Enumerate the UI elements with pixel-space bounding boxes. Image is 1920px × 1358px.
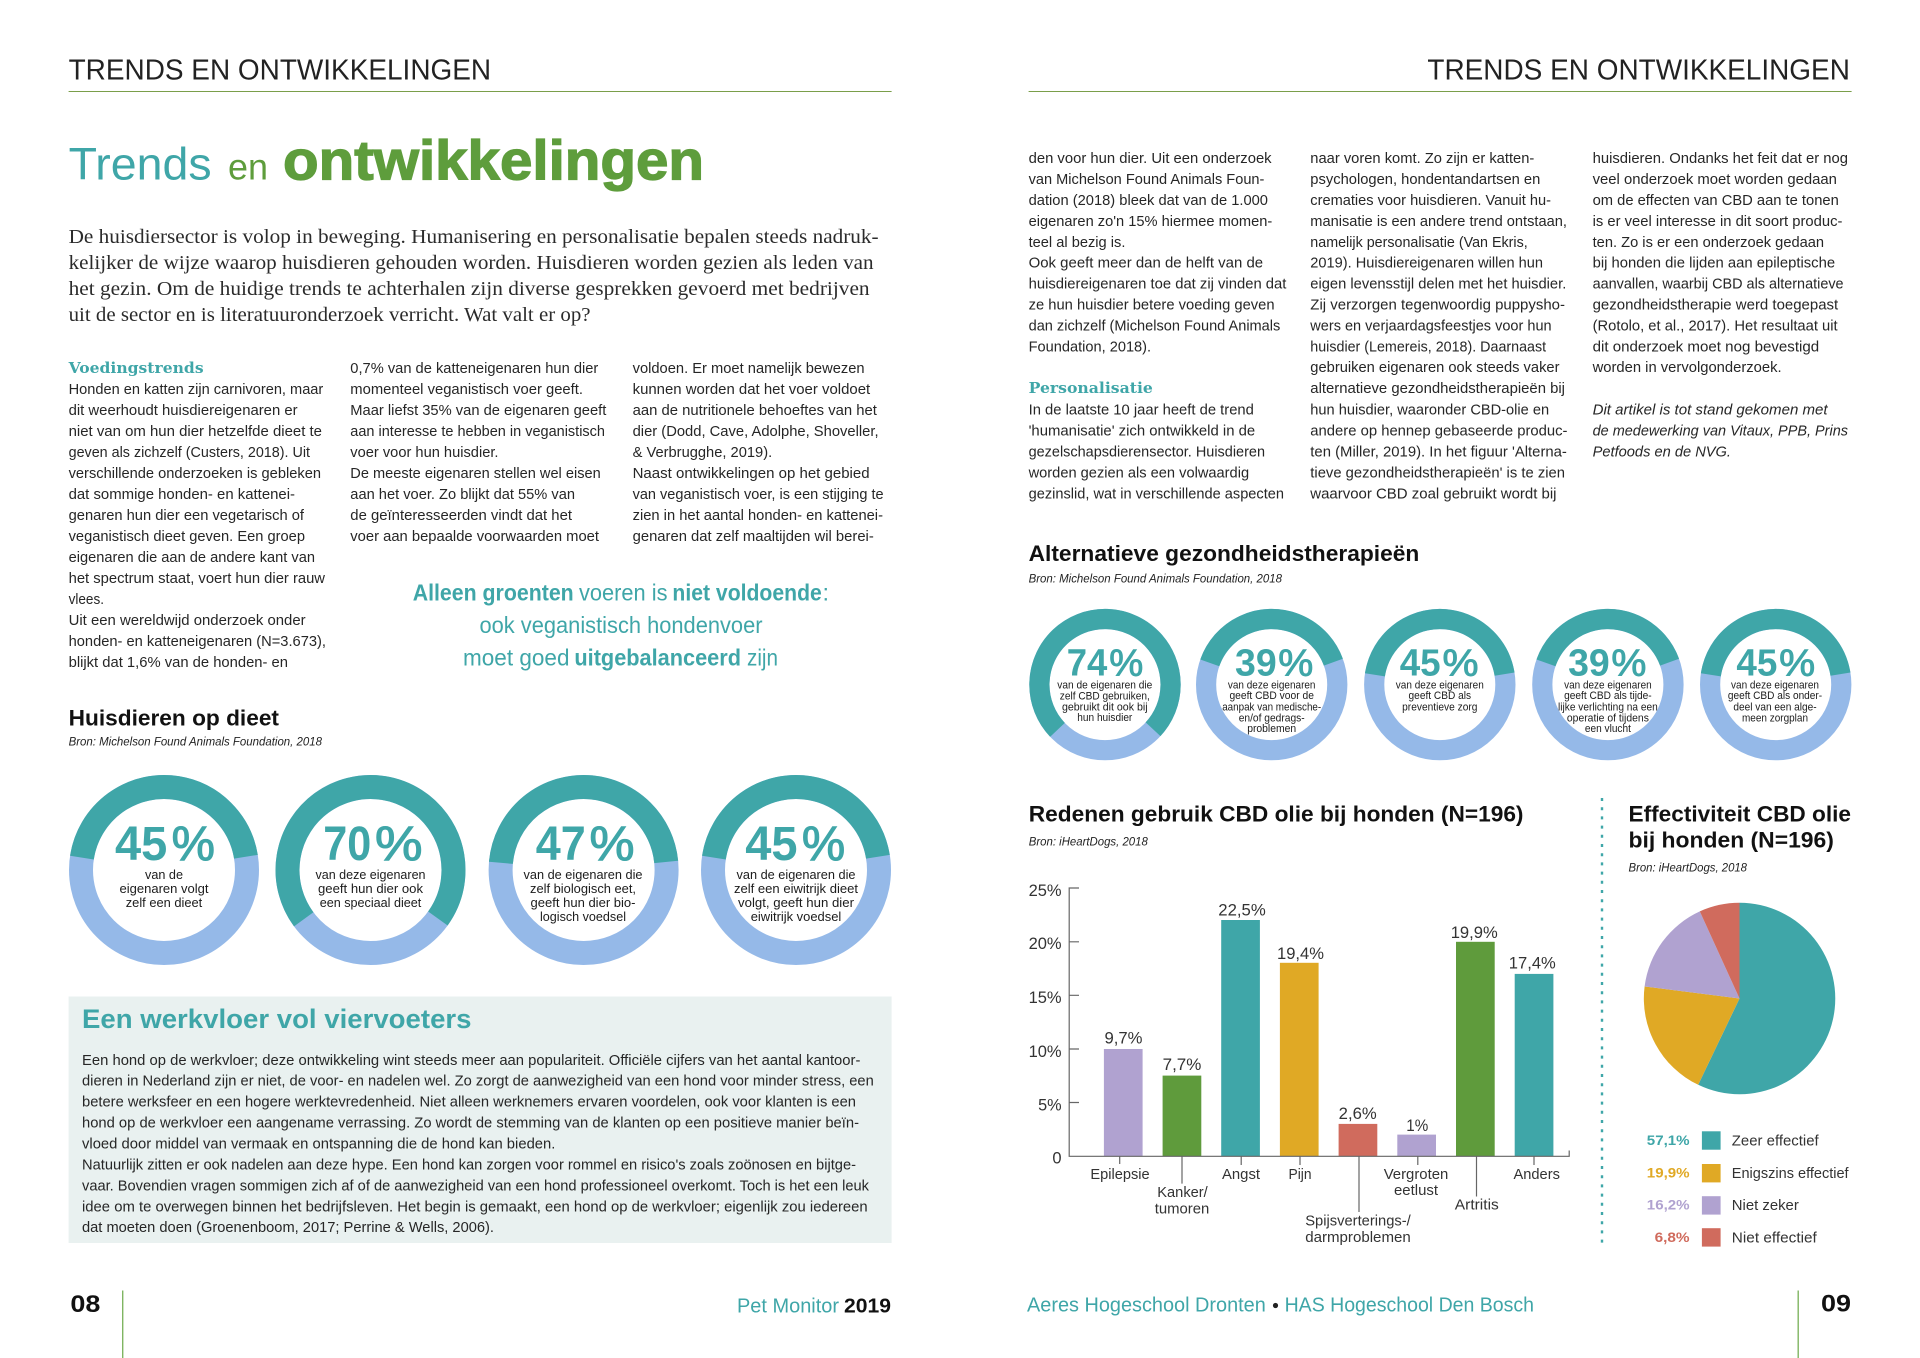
category labels: Kanker/ [1157, 1184, 1209, 1201]
article column 5: andere op hennep gebaseerde produc- [1310, 423, 1568, 439]
article column 1: Voedingstrends: verschillende onderzoeken is gebleken [69, 466, 321, 482]
value labels: 1% [1406, 1117, 1429, 1135]
footer right: 09 [1821, 1290, 1851, 1318]
donut: 39% tijdelijke verlichting: % [1611, 642, 1646, 684]
donut: 39% medische problemen: van deze eigenaren [1228, 680, 1315, 692]
value labels: 2,6% [1339, 1105, 1377, 1123]
article column 6: Dit artikel is tot stand gekomen met [1593, 402, 1829, 418]
article column 1: Voedingstrends: honden- en katteneigenaren (N=3.673), [69, 634, 326, 650]
donut: 70% speciaal dieet: 70 [323, 818, 371, 871]
donut: 39% medische problemen: en/of gedrags- [1239, 712, 1305, 724]
donut: 45% eiwitrijk: zelf een eiwitrijk dieet [734, 881, 858, 896]
running header right: TRENDS EN ONTWIKKELINGEN [1427, 54, 1850, 86]
heading: Effectiviteit CBD olie: bij honden (N=196) [1628, 828, 1834, 852]
article column 3: voldoen. Er moet namelijk bewezen [633, 361, 865, 377]
donut: 47% biologisch: % [590, 818, 634, 871]
donut: 45% eigenaren volgt dieet: 45 [115, 818, 167, 871]
category labels: Epilepsie [1090, 1166, 1150, 1183]
donut: 45% eigenaren volgt dieet: zelf een dieet [126, 895, 203, 910]
article column 5: alternatieve gezondheidstherapieën bij [1310, 381, 1565, 397]
panel: Een werkvloer vol viervoeters: vloed door middel van vermaak en ontspanning die de hond kan bieden. [82, 1137, 555, 1153]
category labels: Anders [1514, 1166, 1560, 1183]
category labels: Pijn [1288, 1166, 1312, 1183]
donut: 45% eigenaren volgt dieet [69, 775, 259, 965]
article column 2: voer voor hun huisdier. [350, 445, 498, 461]
footer right: HAS Hogeschool Den Bosch [1285, 1294, 1534, 1316]
heading: Huisdieren op dieet: Huisdieren op dieet [69, 705, 280, 730]
article column 6: worden in vervolgonderzoek. [1592, 360, 1782, 376]
donut: 45% eigenaren volgt dieet: % [172, 818, 215, 871]
donut: 45% preventieve zorg [1365, 610, 1515, 760]
title: Trends [69, 138, 212, 189]
title [69, 128, 704, 191]
intro paragraph: uit de sector en is literatuuronderzoek verricht. Wat valt er op? [69, 304, 591, 326]
category labels: Artritis [1455, 1196, 1499, 1213]
panel: Een werkvloer vol viervoeters: dieren in Nederland zijn er niet, de voor- en nadelen wel. Zo zorgt de aanwezigheid van een hond voor minder stress, een [82, 1074, 874, 1090]
article column 4 with Personalisatie: Foundation, 2018). [1029, 339, 1151, 355]
article column 5: tieve gezondheidstherapieën' is te zien [1310, 466, 1565, 482]
heading: Effectiviteit CBD olie: Effectiviteit CBD olie [1628, 802, 1851, 827]
article column 1: Voedingstrends: geven als zichzelf (Custers, 2018). Uit [69, 445, 310, 461]
article column 6: gezondheidstherapie werd toegepast [1593, 298, 1838, 314]
intro paragraph: kelijker de wijze waarop huisdieren gehouden worden. Huisdieren worden gezien als leden van [69, 252, 874, 274]
footer right [1027, 1290, 1851, 1358]
footer left: 08 [70, 1291, 100, 1318]
intro paragraph: De huisdiersector is volop in beweging. Humanisering en personalisatie bepalen steeds nadruk- [69, 226, 879, 248]
donut: 45% eiwitrijk: % [802, 818, 845, 871]
bars [1104, 920, 1553, 1156]
article column 1: Voedingstrends: dat sommige honden- en kattenei- [69, 487, 295, 503]
article column 6 [1592, 151, 1848, 460]
article column 2: De meeste eigenaren stellen wel eisen [350, 466, 601, 482]
donut: 74% ook bij huisdier: gebruikt dit ook bij [1062, 701, 1148, 713]
donut: 39% tijdelijke verlichting: operatie of tijdens [1567, 712, 1649, 724]
article column 4 with Personalisatie: Personalisatie [1029, 379, 1153, 397]
article column 1: Voedingstrends: genaren hun dier een vegetarisch of [69, 508, 304, 524]
article column 3: dier (Dodd, Cave, Adolphe, Shoveller, [633, 424, 879, 440]
donut: 47% biologisch: geeft hun dier bio- [530, 895, 636, 910]
donut: 45% algemeen zorgplan: geeft CBD als onder- [1728, 690, 1823, 702]
article column 5: wers en verjaardagsfeestjes voor hun [1309, 318, 1552, 334]
footer right: Aeres Hogeschool Dronten [1027, 1294, 1266, 1316]
article column 4 with Personalisatie: gezelschapsdierensector. Huisdieren [1029, 444, 1265, 460]
article column 3: kunnen worden dat het voer voldoet [633, 382, 870, 398]
pie legend: Enigszins effectief [1732, 1165, 1849, 1182]
donut: 39% tijdelijke verlichting: een vlucht [1585, 723, 1631, 735]
donut: 70% speciaal dieet: van deze eigenaren [316, 867, 426, 882]
panel: Een werkvloer vol viervoeters: Een hond op de werkvloer; deze ontwikkeling wint steeds meer aan populariteit. Officiële cijfers van het aantal kantoor- [82, 1053, 861, 1069]
intro paragraph: het gezin. Om de huidige trends te achterhalen zijn diverse gesprekken gevoerd met bedrijven [69, 278, 870, 300]
heading: Redenen gebruik CBD olie [1029, 802, 1524, 849]
article column 5: psychologen, hondentandartsen en [1310, 172, 1540, 188]
article column 4 with Personalisatie: teel al bezig is. [1029, 235, 1125, 251]
y axis labels: 15% [1029, 989, 1062, 1007]
donut: 39% medische problemen: 39 [1235, 642, 1277, 684]
article column 5 [1309, 151, 1568, 502]
article column 5: gebruiken eigenaren ook steeds vaker [1310, 360, 1560, 376]
article column 4 with Personalisatie: dan zichzelf (Michelson Found Animals [1029, 318, 1280, 334]
donut: 70% speciaal dieet: % [375, 818, 422, 871]
value labels: 7,7% [1163, 1056, 1202, 1074]
donut: 45% preventieve zorg: preventieve zorg [1402, 701, 1477, 713]
pull quote: uitgebalanceerd [574, 644, 741, 670]
article column 6: dit onderzoek moet nog bevestigd [1593, 339, 1819, 355]
article column 4 with Personalisatie: den voor hun dier. Uit een onderzoek [1029, 151, 1272, 167]
pull quote: ook veganistisch hondenvoer [480, 612, 763, 638]
footer left [70, 1290, 891, 1358]
panel: Een werkvloer vol viervoeters [69, 996, 892, 1243]
article column 2: Maar liefst 35% van de eigenaren geeft [350, 403, 606, 419]
donut: 74% ook bij huisdier: zelf CBD gebruiken, [1060, 690, 1150, 702]
bar chart [1029, 882, 1569, 1246]
donut: 39% tijdelijke verlichting: geeft CBD als tijde- [1564, 690, 1652, 702]
pie legend: 57,1% [1647, 1133, 1690, 1148]
y axis labels [1029, 882, 1062, 1167]
article column 1: Voedingstrends: niet van om hun dier hetzelfde dieet te [69, 424, 322, 440]
pie legend [1647, 1131, 1849, 1247]
article column 6: ten. Zo is er een onderzoek gedaan [1593, 235, 1824, 251]
dotted divider [1601, 798, 1603, 1244]
donut: 45% eiwitrijk: van de eigenaren die [736, 867, 856, 882]
category labels [1090, 1166, 1560, 1246]
article column 5: naar voren komt. Zo zijn er katten- [1310, 151, 1535, 167]
donut: 39% medische problemen: geeft CBD voor de [1229, 690, 1314, 702]
article column 1: Voedingstrends: Voedingstrends [68, 359, 204, 377]
donut: 45% algemeen zorgplan: 45 [1736, 642, 1777, 684]
y axis labels: 25% [1029, 882, 1062, 900]
donut: 74% ook bij huisdier: % [1109, 642, 1143, 684]
pull quote: moet goed [463, 644, 570, 670]
intro paragraph [69, 226, 879, 326]
article column 5: crematies voor huisdieren. Vanuit hu- [1310, 193, 1551, 209]
article column 6: Petfoods en de NVG. [1593, 444, 1731, 460]
pie legend: Niet effectief [1732, 1230, 1818, 1247]
article column 1: Voedingstrends: blijkt dat 1,6% van de honden- en [69, 655, 288, 671]
article column 4 with Personalisatie: huisdiereigenaren toe dat zij vinden dat [1029, 277, 1286, 293]
category labels: Vergroten [1384, 1166, 1448, 1183]
donut: 74% ook bij huisdier: van de eigenaren die [1057, 680, 1152, 692]
article column 1: Voedingstrends: vlees. [69, 592, 104, 608]
article column 2: momenteel veganistisch voer geeft. [350, 382, 583, 398]
article column 1: Voedingstrends: eigenaren die aan de andere kant van [69, 550, 315, 566]
value labels: 17,4% [1509, 954, 1556, 972]
value labels: 22,5% [1218, 902, 1266, 920]
value labels: 19,4% [1277, 945, 1324, 963]
donut: 70% speciaal dieet: een speciaal dieet [320, 895, 422, 910]
donut: 45% algemeen zorgplan: % [1779, 642, 1815, 684]
article column 4 with Personalisatie: worden gezien als een volwaardig [1028, 466, 1249, 482]
donut: 74% ook bij huisdier [1012, 592, 1198, 777]
donut: 70% speciaal dieet: geeft hun dier ook [318, 881, 424, 896]
donut: 39% tijdelijke verlichting: van deze eigenaren [1564, 680, 1652, 692]
donut: 45% preventieve zorg: geeft CBD als [1409, 690, 1472, 702]
pull quote: : [822, 579, 829, 605]
pie legend: Zeer effectief [1732, 1133, 1820, 1150]
article column 5: waarvoor CBD zoal gebruikt wordt bij [1309, 486, 1556, 502]
value labels [1104, 902, 1556, 1135]
heading: Effectiviteit CBD olie: Bron: iHeartDogs, 2018 [1628, 862, 1748, 874]
article column 2: de geïnteresseerden vindt dat het [350, 508, 572, 524]
article column 1: Voedingstrends: Uit een wereldwijd onderzoek onder [69, 613, 306, 629]
value labels: 19,9% [1451, 924, 1498, 942]
panel: Een werkvloer vol viervoeters: Een werkvloer vol viervoeters [82, 1004, 472, 1034]
heading: Redenen gebruik CBD olie: Redenen gebruik CBD olie bij honden (N=196) [1029, 802, 1524, 827]
article column 2: 0,7% van de katteneigenaren hun dier [350, 361, 599, 377]
title: en [228, 146, 268, 187]
donut: 45% preventieve zorg: van deze eigenaren [1396, 680, 1484, 692]
heading: Effectiviteit CBD olie [1628, 802, 1851, 874]
category labels: Spijsverterings-/ [1305, 1212, 1412, 1229]
article column 1: Voedingstrends: dit weerhoudt huisdiereigenaren er [69, 403, 298, 419]
article column 5: 2019). Huisdiereigenaren willen hun [1310, 256, 1543, 272]
category labels: eetlust [1394, 1182, 1439, 1199]
article column 3: genaren dat zelf maaltijden wil berei- [633, 529, 874, 545]
donut: 45% eigenaren volgt dieet: van de [145, 867, 183, 882]
donut: 47% biologisch: logisch voedsel [540, 909, 626, 924]
article column 5: namelijk personalisatie (Van Ekris, [1310, 235, 1528, 251]
article column 4 with Personalisatie: dation (2018) bleek dat van de 1.000 [1029, 193, 1268, 209]
donut: 39% medische problemen: problemen [1247, 723, 1296, 735]
article column 2: aan interesse te hebben in veganistisch [350, 424, 605, 440]
article column 4 with Personalisatie: ze hun huisdier betere voeding geven [1029, 298, 1275, 314]
article column 2: aan het voer. Zo blijkt dat 55% van [350, 487, 575, 503]
article column 4 with Personalisatie: 'humanisatie' zich ontwikkeld in de [1029, 423, 1255, 439]
article column 4 with Personalisatie: gezinslid, wat in verschillende aspecten [1029, 486, 1284, 502]
pull quote: zijn [747, 644, 778, 670]
donut: 45% eiwitrijk: eiwitrijk voedsel [751, 909, 841, 924]
heading: Redenen gebruik CBD olie: Bron: iHeartDogs, 2018 [1029, 837, 1148, 849]
donut: 45% algemeen zorgplan: meen zorgplan [1742, 712, 1808, 724]
donut: 45% eiwitrijk: 45 [745, 818, 798, 871]
article column 4 with Personalisatie: In de laatste 10 jaar heeft de trend [1029, 402, 1254, 418]
donut: 39% medische problemen: % [1278, 642, 1313, 684]
y axis labels: 0 [1052, 1149, 1062, 1167]
donut: 39% tijdelijke verlichting: 39 [1568, 642, 1610, 684]
heading: Alternatieve gezondheidstherapieën: Bron: Michelson Found Animals Foundation, 2018 [1029, 574, 1283, 586]
category labels: Angst [1222, 1166, 1261, 1183]
pie chart [1644, 903, 1835, 1094]
article column 2 [350, 361, 606, 545]
article column 5: manisatie is een andere trend ontstaan, [1310, 214, 1567, 230]
article column 1: Voedingstrends: het spectrum staat, voert hun dier rauw [69, 571, 326, 587]
article column 6: (Rotolo, et al., 2017). Het resultaat uit [1593, 318, 1838, 334]
donut: 47% biologisch: van de eigenaren die [524, 867, 642, 882]
panel: Een werkvloer vol viervoeters: vaar. Bovendien vragen sommigen zich af of de aanwezigheid van een hond professioneel overkomt. Toch is het een leuk [82, 1179, 870, 1195]
article column 3 [633, 361, 884, 545]
donut: 74% ook bij huisdier: hun huisdier [1077, 712, 1133, 724]
donut: 45% algemeen zorgplan [1701, 610, 1851, 760]
donut: 45% preventieve zorg: % [1442, 642, 1478, 684]
pie legend: 19,9% [1647, 1165, 1690, 1180]
article column 4 with Personalisatie: eigenaren zo'n 15% hiermee momen- [1029, 214, 1273, 230]
pull quote: niet voldoende [672, 579, 822, 605]
y axis labels: 20% [1029, 935, 1062, 953]
pie legend: 16,2% [1647, 1197, 1690, 1212]
heading: Huisdieren op dieet [69, 705, 323, 749]
article column 6: huisdieren. Ondanks het feit dat er nog [1593, 151, 1848, 167]
y axis labels: 5% [1038, 1097, 1062, 1115]
donut: 74% ook bij huisdier: 74 [1067, 642, 1107, 684]
article column 1: Voedingstrends: Honden en katten zijn carnivoren, maar [69, 382, 324, 398]
heading: Alternatieve gezondheidstherapieën: Alternatieve gezondheidstherapieën [1029, 541, 1419, 566]
running header left: TRENDS EN ONTWIKKELINGEN [69, 54, 491, 86]
panel: Een werkvloer vol viervoeters: idee om te overwegen binnen het bedrijfsleven. Het begin is gemaakt, een hond op de werkvloer; eigenlijk zou iedereen [82, 1199, 868, 1215]
article column 6: veel onderzoek moet worden gedaan [1593, 172, 1837, 188]
donut: 45% algemeen zorgplan: van deze eigenaren [1731, 680, 1819, 692]
panel: Een werkvloer vol viervoeters: hond op de werkvloer een aangename verrassing. Zo wordt de stemming van de klanten op een positieve manier beïn- [82, 1116, 859, 1132]
axes and leader lines [1069, 888, 1569, 1212]
donut: 39% tijdelijke verlichting [1524, 601, 1692, 769]
value labels: 9,7% [1104, 1030, 1143, 1048]
article column 5: eigen levensstijl delen met het huisdier. [1310, 277, 1566, 293]
article column 3: & Verbrugghe, 2019). [633, 445, 772, 461]
title: ontwikkelingen [283, 128, 704, 191]
donut: 39% tijdelijke verlichting: lijke verlichting na een [1558, 701, 1658, 713]
donut: 45% preventieve zorg: 45 [1400, 642, 1441, 684]
article column 6: bij honden die lijden aan epileptische [1593, 256, 1835, 272]
article column 4 with Personalisatie [1028, 151, 1286, 502]
pull quote [413, 579, 829, 670]
heading: Huisdieren op dieet: Bron: Michelson Found Animals Foundation, 2018 [69, 737, 323, 749]
pull quote: Alleen groenten [413, 579, 574, 605]
pull quote: voeren is [579, 579, 668, 605]
article column 3: Naast ontwikkelingen op het gebied [633, 466, 870, 482]
article column 2: voer aan bepaalde voorwaarden moet [350, 529, 599, 545]
donut: 39% medische problemen: aanpak van medische- [1222, 701, 1322, 713]
donut: 47% biologisch [493, 780, 674, 960]
footer left: 2019 [844, 1296, 891, 1318]
article column 6: de medewerking van Vitaux, PPB, Prins [1593, 423, 1848, 439]
category labels: tumoren [1155, 1200, 1209, 1218]
article column 5: huisdier (Lemereis, 2018). Daarnaast [1310, 339, 1546, 355]
article column 5: Zij verzorgen tegenwoordig puppysho- [1310, 298, 1565, 314]
article column 3: zien in het aantal honden- en kattenei- [633, 508, 883, 524]
donut: 47% biologisch: zelf biologisch eet, [530, 881, 636, 896]
pie legend: Niet zeker [1732, 1197, 1799, 1214]
article column 6: aanvallen, waarbij CBD als alternatieve [1593, 277, 1844, 293]
article column 6: om de effecten van CBD aan te tonen [1593, 193, 1839, 209]
panel: Een werkvloer vol viervoeters: betere werksfeer en een hogere werktevredenheid. Niet alleen werknemers ervaren voordelen, ook voor klanten is een [82, 1095, 856, 1111]
donut: 45% eiwitrijk [701, 775, 891, 965]
donut: 39% medische problemen [1188, 601, 1356, 769]
donut: 47% biologisch: 47 [536, 818, 586, 871]
article column 6: is er veel interesse in dit soort produc- [1593, 214, 1843, 230]
article column 1: Voedingstrends [68, 359, 326, 671]
article column 5: ten (Miller, 2019). In het figuur 'Alterna- [1310, 444, 1567, 460]
article column 4 with Personalisatie: Ook geeft meer dan de helft van de [1029, 256, 1263, 272]
article column 5: hun huisdier, waaronder CBD-olie en [1310, 402, 1549, 418]
pie legend: 6,8% [1655, 1230, 1690, 1245]
donut: 45% algemeen zorgplan: deel van een alge- [1733, 701, 1817, 713]
article column 3: aan de nutritionele behoeftes van het [633, 403, 877, 419]
category labels: darmproblemen [1305, 1229, 1411, 1246]
panel: Een werkvloer vol viervoeters: dat moeten doen (Groenenboom, 2017; Perrine & Wells, 2006). [82, 1220, 494, 1236]
footer left: Pet Monitor [737, 1296, 839, 1318]
article column 4 with Personalisatie: van Michelson Found Animals Foun- [1029, 172, 1265, 188]
article column 3: van veganistisch voer, is een stijging te [633, 487, 884, 503]
panel: Een werkvloer vol viervoeters: Natuurlijk zitten er ook nadelen aan deze hype. Een hond kan zorgen voor rommel en risico's zoals zoönosen en bijtge- [82, 1158, 856, 1174]
donut: 70% speciaal dieet [255, 754, 486, 986]
donut: 45% eiwitrijk: volgt, geeft hun dier [738, 895, 855, 910]
donut: 45% eigenaren volgt dieet: eigenaren volgt [120, 881, 209, 896]
article column 1: Voedingstrends: veganistisch dieet geven. Een groep [69, 529, 305, 545]
y axis labels: 10% [1029, 1043, 1062, 1061]
heading: Alternatieve gezondheidstherapieën [1029, 541, 1419, 586]
